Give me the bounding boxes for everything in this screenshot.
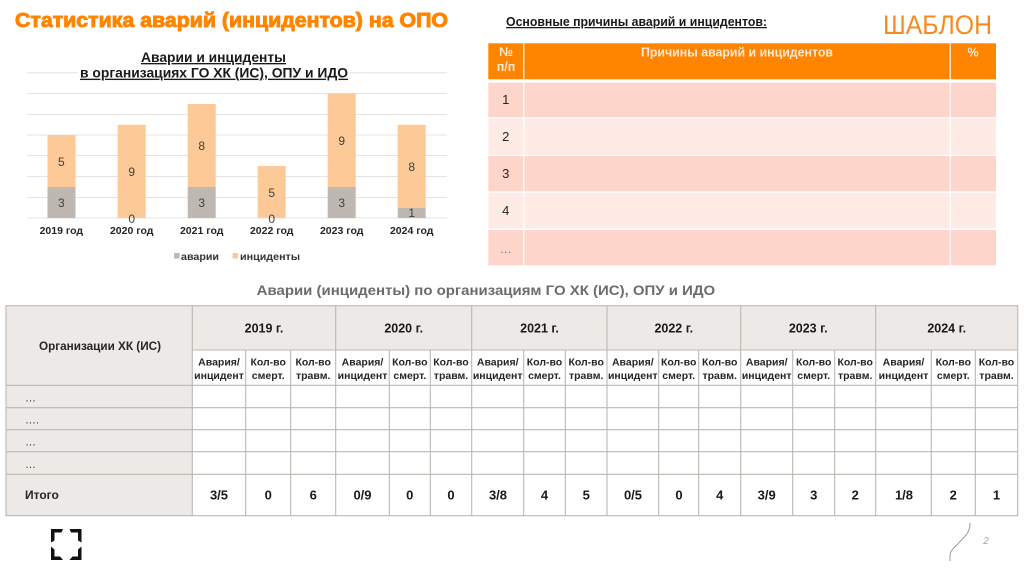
bar 2019: 2019 год: [40, 225, 83, 237]
totals row: 2: [852, 488, 859, 503]
column sub-headers: смерт.: [528, 370, 561, 382]
totals row: 2: [950, 488, 957, 503]
totals row: 3/9: [758, 488, 776, 503]
totals row: 5: [583, 488, 590, 503]
totals row: 0: [675, 488, 683, 503]
bar 2022: 5: [268, 186, 275, 200]
bar 2020: 0: [128, 212, 135, 226]
totals row: 0/9: [353, 488, 372, 503]
column sub-headers: Кол-во: [433, 357, 469, 369]
chart legend: аварии: [181, 251, 219, 263]
year headers: 2022 г.: [654, 322, 693, 336]
title: Статистика аварий (инцидентов) на ОПО: [15, 10, 448, 32]
bar 2020: 9: [128, 165, 135, 179]
bar 2020: [110, 125, 154, 237]
totals row: 6: [310, 488, 317, 503]
chart title: Аварии и инциденты: [141, 50, 286, 65]
bar 2021: 3: [198, 196, 205, 210]
column sub-headers: Авария/: [612, 357, 654, 369]
totals row: 1/8: [895, 488, 913, 503]
bar 2024: [390, 125, 434, 237]
year headers: 2021 г.: [520, 322, 559, 336]
causes row 1: 1: [502, 92, 509, 107]
column sub-headers: травм.: [979, 370, 1014, 382]
year headers: [245, 322, 966, 336]
bar 2023: [320, 93, 364, 237]
totals row: 0: [406, 488, 413, 503]
column sub-headers: смерт.: [662, 370, 695, 382]
totals row: 0: [265, 488, 272, 503]
causes table header: Причины аварий и инцидентов: [641, 46, 833, 60]
totals row: 0: [447, 488, 455, 503]
bar 2020: 2020 год: [110, 225, 154, 237]
organisations table: [6, 306, 1018, 516]
causes table: [488, 43, 996, 266]
column sub-headers: инцидент: [338, 370, 387, 382]
totals row: 1: [993, 488, 1000, 503]
bar 2023: 3: [338, 196, 345, 210]
column sub-headers: травм.: [434, 370, 468, 382]
column sub-headers: Кол-во: [250, 357, 286, 369]
bar 2021: [180, 104, 224, 237]
column sub-headers: травм.: [296, 370, 330, 382]
causes table header: №: [499, 45, 513, 59]
bar 2022: 0: [268, 212, 275, 226]
column sub-headers: Кол-во: [295, 357, 331, 369]
organisation placeholder rows: [25, 393, 39, 471]
bar 2022: [250, 166, 294, 237]
bar 2021: 8: [198, 139, 205, 153]
column sub-headers: Кол-во: [702, 357, 737, 369]
column sub-headers: инцидент: [608, 370, 658, 382]
column sub-headers: инцидент: [879, 370, 928, 382]
chart legend: инциденты: [240, 251, 300, 263]
column sub-headers: Авария/: [198, 357, 240, 369]
organisation placeholder rows: ….: [25, 415, 39, 427]
totals row: 0/5: [624, 488, 642, 503]
column sub-headers: Кол-во: [979, 357, 1014, 369]
causes table header: п/п: [497, 60, 515, 74]
totals row: 3/8: [489, 488, 507, 503]
column sub-headers: смерт.: [393, 370, 426, 382]
column sub-headers: травм.: [569, 370, 603, 382]
causes row 1: [488, 83, 996, 117]
causes row 4: 4: [502, 203, 509, 218]
column sub-headers: смерт.: [797, 370, 830, 382]
chart legend: [174, 251, 300, 263]
causes row 2: [488, 119, 996, 155]
causes row 2: 2: [502, 129, 509, 144]
column sub-headers: Кол-во: [936, 357, 971, 369]
page number: 2: [982, 536, 989, 547]
organisation placeholder rows: …: [25, 393, 36, 405]
bar 2024: 1: [408, 206, 415, 220]
column sub-headers: Кол-во: [661, 357, 696, 369]
icon: corner brackets logo: [51, 529, 82, 560]
chart title: [80, 50, 348, 81]
column sub-headers: травм.: [702, 370, 737, 382]
causes row 5: [488, 230, 996, 265]
bar 2024: 8: [408, 160, 415, 174]
column sub-headers: Кол-во: [568, 357, 604, 369]
column sub-headers: Авария/: [342, 357, 383, 369]
organisation placeholder rows: …: [25, 459, 36, 471]
column sub-headers: Кол-во: [392, 357, 428, 369]
column sub-headers: Кол-во: [527, 357, 562, 369]
chart title: в организациях ГО ХК (ИС), ОПУ и ИДО: [80, 66, 348, 81]
causes row 5: …: [500, 242, 512, 256]
template label: ШАБЛОН: [883, 10, 992, 40]
causes heading: Основные причины аварий и инцидентов:: [506, 15, 767, 29]
year headers: 2020 г.: [384, 322, 423, 336]
organisation column header: Организации ХК (ИС): [39, 339, 161, 353]
column sub-headers: Авария/: [477, 357, 519, 369]
column sub-headers: Кол-во: [796, 357, 831, 369]
column sub-headers: инцидент: [742, 370, 792, 382]
bar 2019: 5: [58, 155, 65, 169]
bar 2019: [40, 135, 83, 237]
year headers: 2019 г.: [245, 322, 283, 336]
totals row: Итого: [25, 488, 59, 502]
column sub-headers: смерт.: [252, 370, 285, 382]
year headers: 2024 г.: [927, 322, 966, 336]
totals row: 3/5: [210, 488, 228, 503]
column sub-headers: травм.: [838, 370, 872, 382]
organisations table heading: Аварии (инциденты) по организациям ГО ХК (ИС), ОПУ и ИДО: [257, 282, 715, 298]
page curve: [950, 523, 970, 561]
causes row 4: [488, 193, 996, 228]
column sub-headers: Авария/: [883, 357, 924, 369]
column sub-headers: смерт.: [937, 370, 970, 382]
causes row 3: [488, 156, 996, 191]
causes row 3: 3: [502, 166, 509, 181]
bar 2021: 2021 год: [180, 225, 224, 237]
totals row: 4: [541, 488, 549, 503]
totals row: 4: [716, 488, 724, 503]
year headers: 2023 г.: [789, 322, 828, 336]
bar 2023: 9: [338, 134, 345, 148]
causes table header: %: [967, 46, 979, 60]
column sub-headers: Кол-во: [837, 357, 873, 369]
causes table header: [488, 43, 996, 79]
stacked bar chart: accidents and incidents: [27, 50, 447, 263]
column sub-headers: инцидент: [194, 370, 244, 382]
organisation placeholder rows: …: [25, 437, 36, 449]
totals row: [25, 488, 1000, 503]
bar 2023: 2023 год: [320, 225, 364, 237]
totals row: 3: [810, 488, 817, 503]
column sub-headers: [194, 357, 1014, 382]
column sub-headers: инцидент: [473, 370, 523, 382]
bar 2024: 2024 год: [390, 225, 434, 237]
column sub-headers: Авария/: [746, 357, 788, 369]
bar 2022: 2022 год: [250, 225, 294, 237]
bar 2019: 3: [58, 196, 65, 210]
